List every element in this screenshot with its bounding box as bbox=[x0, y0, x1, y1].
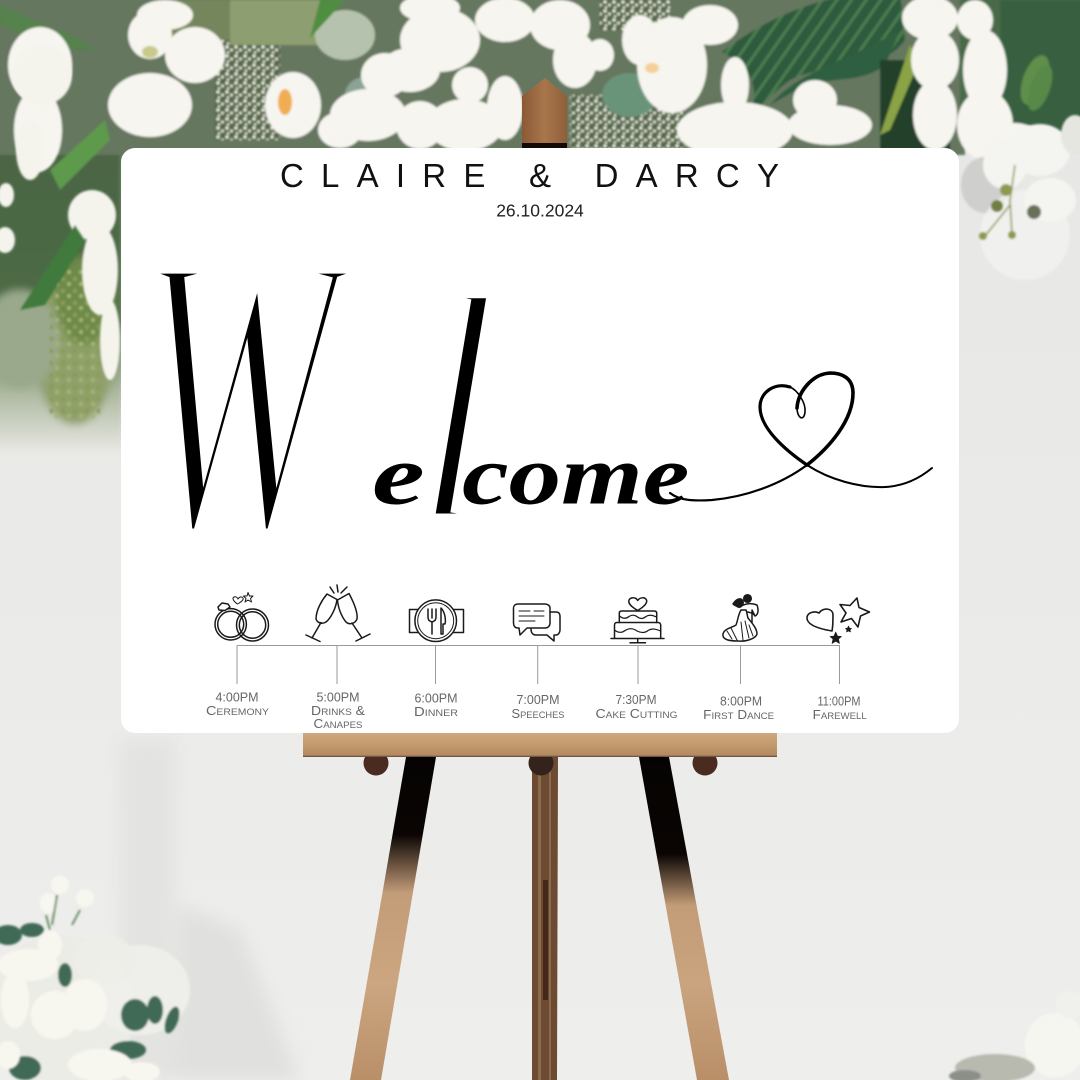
hanging vines on left bbox=[50, 270, 100, 420]
label: 5:00PM Drinks & Canapes: Drinks & bbox=[311, 704, 366, 718]
icon: speech bubbles bbox=[514, 604, 560, 641]
wall shadows bbox=[120, 740, 300, 1080]
timeline axis and ticks bbox=[237, 646, 840, 684]
flower wall: left greenery bbox=[0, 110, 125, 450]
flowers on left side bbox=[0, 45, 120, 380]
bottom left flowers bbox=[0, 876, 190, 1080]
names heading: CLAIRE & DARCY bbox=[280, 157, 779, 194]
label: 4:00PM Ceremony: 4:00PM bbox=[216, 690, 258, 704]
label: 6:00PM Dinner bbox=[414, 692, 459, 719]
label: 5:00PM Drinks & Canapes: 5:00PM bbox=[316, 690, 360, 704]
icon: dinner plate with cutlery bbox=[410, 600, 464, 642]
flower wall: top band bbox=[0, 0, 1080, 172]
label: 7:00PM Speeches: Speeches bbox=[512, 707, 564, 721]
label: 4:00PM Ceremony: Ceremony bbox=[206, 704, 269, 718]
label: 7:30PM Cake Cutting: 7:30PM bbox=[616, 693, 656, 707]
label: 5:00PM Drinks & Canapes bbox=[311, 690, 366, 731]
welcome script heading: l bbox=[413, 228, 499, 590]
label: 7:00PM Speeches bbox=[512, 693, 564, 721]
hanging flowers on right side bbox=[961, 62, 1080, 280]
white blooms across top bbox=[8, 0, 1043, 172]
orange centres bbox=[278, 89, 292, 115]
label: 8:00PM First Dance: First Dance bbox=[703, 708, 774, 722]
label: 8:00PM First Dance: 8:00PM bbox=[720, 694, 762, 708]
left fern bbox=[0, 5, 95, 50]
label: 5:00PM Drinks & Canapes: Canapes bbox=[314, 717, 362, 731]
easel pegs bbox=[364, 750, 718, 776]
label: 8:00PM First Dance bbox=[703, 694, 774, 722]
welcome script heading: come bbox=[462, 429, 689, 523]
heart flourish bbox=[670, 373, 932, 500]
icon: champagne flutes bbox=[306, 585, 370, 642]
bottom right flowers bbox=[949, 991, 1080, 1080]
welcome script heading: e bbox=[372, 429, 425, 523]
icon: dancing couple bbox=[723, 595, 758, 641]
icon: wedding cake bbox=[611, 598, 664, 643]
white sign board bbox=[121, 148, 959, 733]
label: 6:00PM Dinner: Dinner bbox=[414, 705, 459, 719]
icon: wedding rings bbox=[215, 592, 268, 641]
easel legs bbox=[350, 757, 729, 1080]
label: 6:00PM Dinner: 6:00PM bbox=[414, 692, 458, 706]
label: 11:00PM Farewell: Farewell bbox=[813, 708, 867, 722]
label: 11:00PM Farewell: 11:00PM bbox=[818, 694, 860, 708]
easel ledge bbox=[303, 733, 777, 757]
date: 26.10.2024 bbox=[496, 200, 584, 220]
easel top post bbox=[522, 78, 567, 149]
welcome script heading: W bbox=[137, 173, 337, 616]
icon: heart and stars bbox=[807, 598, 870, 644]
label: 4:00PM Ceremony bbox=[206, 690, 269, 718]
label: 11:00PM Farewell bbox=[813, 694, 867, 722]
fern top right bbox=[722, 0, 905, 110]
label: 7:00PM Speeches: 7:00PM bbox=[516, 693, 560, 707]
label: 7:30PM Cake Cutting bbox=[596, 693, 678, 721]
welcome script heading bbox=[137, 173, 689, 616]
label: 7:30PM Cake Cutting: Cake Cutting bbox=[596, 707, 678, 721]
